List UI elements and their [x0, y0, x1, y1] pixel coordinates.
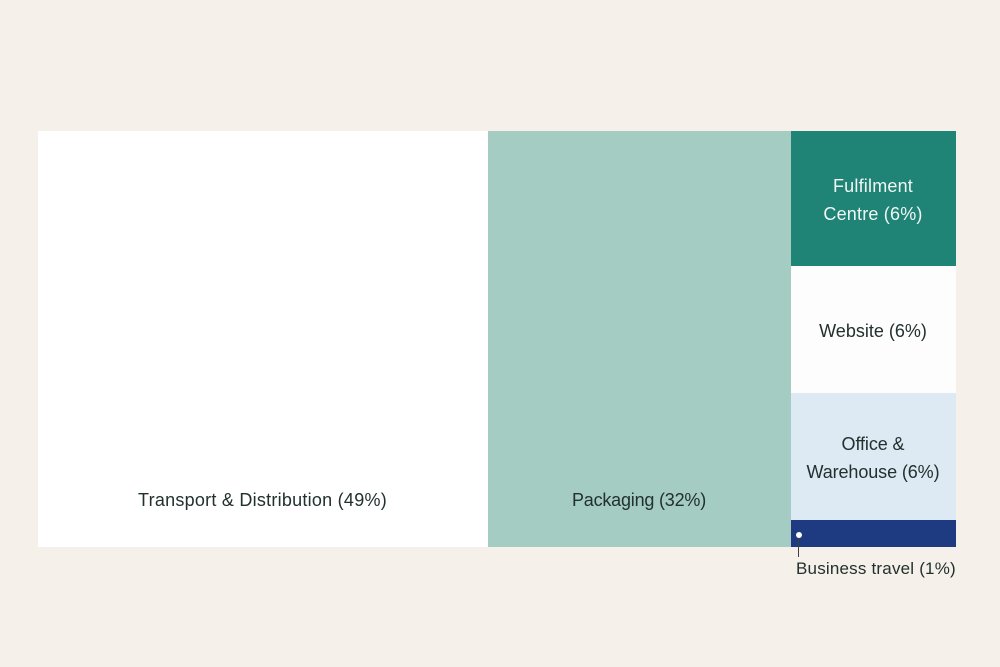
panel: Office & Warehouse	[790, 393, 956, 520]
label: Fulfilment Centre: Fulfilment	[833, 176, 913, 196]
panel: Packaging	[488, 131, 790, 547]
panel: Fulfilment Centre	[790, 131, 956, 266]
label: Office & Warehouse	[806, 434, 940, 482]
label: Office & Warehouse: Office &	[842, 434, 904, 454]
marker dot	[796, 532, 802, 538]
label: Office & Warehouse: Warehouse (6%)	[806, 462, 940, 482]
callout: Business travel marker	[796, 532, 802, 557]
leader line	[798, 538, 799, 557]
label: Fulfilment Centre	[823, 176, 923, 224]
label: Transport & Distribution: Transport & Distribution (49%)	[138, 490, 387, 510]
panel: Website	[790, 266, 956, 393]
label: Business travel: Business travel (1%)	[796, 559, 956, 578]
label: Fulfilment Centre: Centre (6%)	[823, 204, 923, 224]
label: Packaging: Packaging (32%)	[572, 490, 706, 510]
panel: Transport & Distribution	[38, 131, 488, 547]
label: Website: Website (6%)	[819, 321, 927, 341]
panel: Business travel	[790, 520, 956, 547]
